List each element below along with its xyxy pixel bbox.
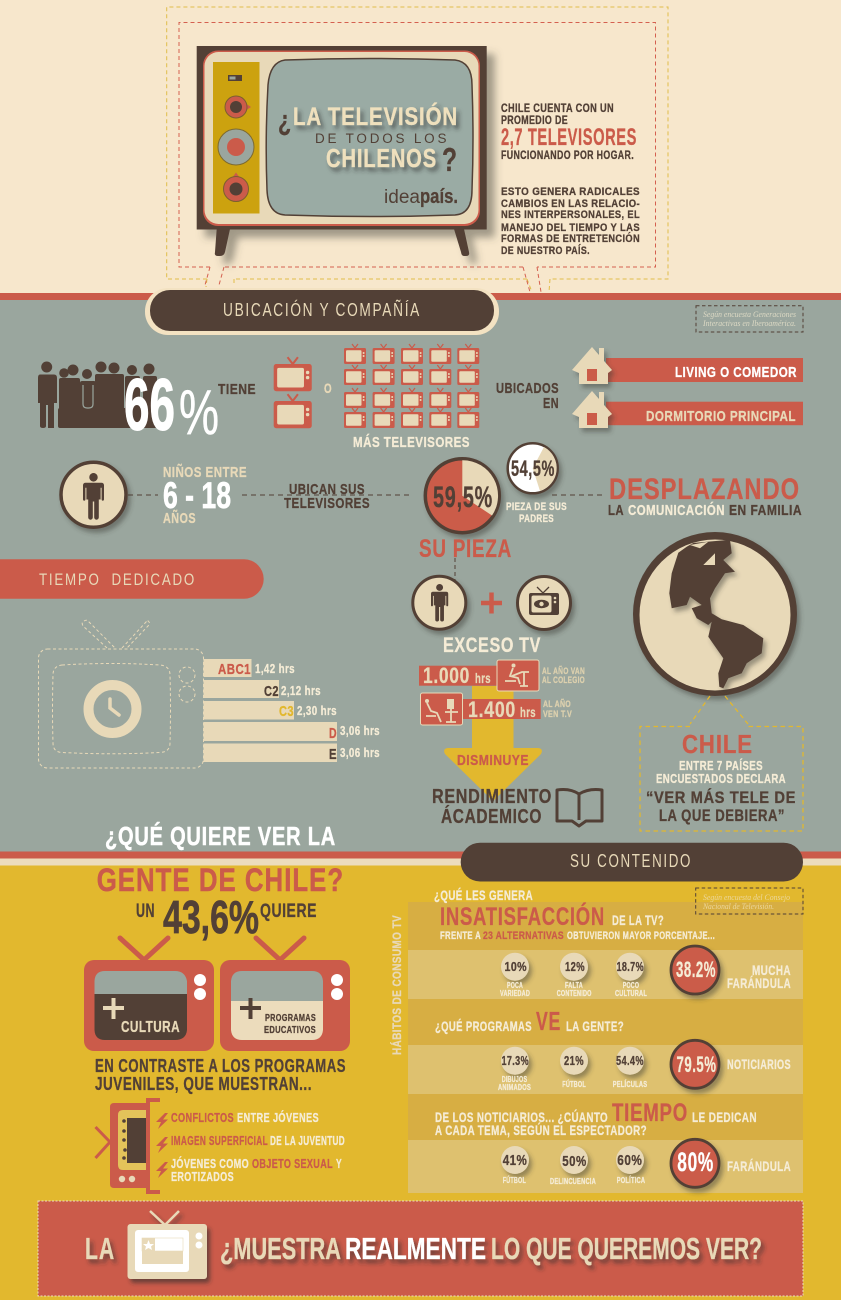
list item: objeto sexual: OBJETO SEXUAL — [252, 1157, 333, 1171]
label: ubican sus televisores — [284, 481, 370, 512]
arrow: disminuye — [444, 686, 542, 801]
stat: 1.000 hrs al colegio: AL AÑO VAN — [542, 666, 585, 677]
icon: globe — [633, 532, 797, 696]
heading pill: ubicación y compañía — [145, 288, 499, 335]
stats row: insatisfacción: CONTENIDO — [557, 989, 592, 998]
list item: objeto sexual — [156, 1156, 342, 1184]
heading: qué quiere ver la: ¿QUÉ QUIERE VER LA — [105, 821, 336, 851]
heading: desplazando la comunicación en familia: EN FAMILIA — [729, 503, 802, 519]
stats row: insatisfacción: FALTA — [565, 981, 583, 990]
icon: television más cultura: CULTURA — [121, 1019, 180, 1036]
logo: ideapaís: idea — [384, 187, 420, 208]
icon: television más programas educativos — [220, 938, 350, 1051]
label: pieza de sus padres: PADRES — [519, 513, 554, 525]
list item: conflictos entre jóvenes: CONFLICTOS — [171, 1111, 234, 1125]
stat: 1.400 hrs ven tv: VEN T.V — [543, 709, 572, 720]
stats row: programas: ANIMADOS — [498, 1083, 531, 1092]
bar chart: horas por grupo socioeconómico — [204, 659, 380, 763]
stat: un 43,6% quiere: QUIERE — [260, 901, 317, 922]
icon: viewer watching tv — [420, 693, 462, 725]
stat: 66 percent: % — [179, 378, 219, 448]
icon: open book — [557, 790, 602, 826]
bar: c2: C2 — [264, 683, 279, 700]
label: o: O — [324, 380, 332, 396]
stats row: insatisfacción: 38.2% — [676, 957, 716, 982]
panel: hábitos de consumo tv — [389, 888, 803, 1193]
title: la televisión de todos los chilenos: CHILENOS — [326, 143, 437, 173]
question: insatisfacción: OBTUVIERON MAYOR PORCENTAJE... — [567, 930, 715, 942]
heading pill: su contenido — [461, 843, 803, 882]
source note: generaciones interactivas: Interactivas en Iberoamérica. — [702, 319, 796, 328]
stats row: noticiarios: FÚTBOL — [503, 1176, 526, 1185]
heading pill: ubicación y compañía: UBICACIÓN Y COMPAÑÍA — [223, 299, 421, 320]
stats row: insatisfacción — [500, 946, 791, 998]
label: pieza de sus padres: PIEZA DE SUS — [506, 501, 567, 513]
label: ubicados en — [496, 381, 559, 412]
icon: person circle — [413, 576, 466, 629]
list item: imagen superficial: IMAGEN SUPERFICIAL — [171, 1134, 268, 1148]
icon: television más programas educativos: PROGRAMAS — [265, 1012, 316, 1024]
list item: imagen superficial: DE LA JUVENTUD — [270, 1134, 345, 1148]
stat: un 43,6% quiere: UN — [136, 901, 155, 922]
stats row: insatisfacción: CULTURAL — [615, 989, 647, 998]
question: insatisfacción — [434, 888, 715, 942]
heading: su pieza: SU PIEZA — [419, 535, 512, 563]
callout: chile ve más tele: CHILE — [682, 729, 753, 759]
stats row: programas — [498, 1040, 791, 1092]
stats row: noticiarios: DELINCUENCIA — [550, 1177, 596, 1186]
banner: la tv muestra realmente lo que queremos ver: ¿MUESTRA — [220, 1231, 341, 1266]
stats row: programas: PELÍCULAS — [613, 1080, 648, 1089]
banner: la tv muestra realmente lo que queremos ver: REALMENTE — [345, 1231, 486, 1266]
arrow: disminuye: DISMINUYE — [457, 753, 529, 769]
list item: conflictos entre jóvenes — [156, 1110, 319, 1129]
title: la televisión de todos los chilenos: LA TELEVISIÓN — [293, 101, 458, 131]
callout: chile ve más tele: ENTRE 7 PAÍSES — [679, 758, 763, 773]
background: yellow section — [0, 865, 841, 1300]
location: living o comedor: LIVING O COMEDOR — [675, 364, 797, 381]
stats row: insatisfacción: 10% — [504, 959, 527, 974]
stats row: insatisfacción: POCA — [507, 981, 523, 990]
label: ubicados en: EN — [543, 396, 559, 412]
stat: 1.400 hrs ven tv: AL AÑO — [543, 699, 571, 710]
title: la televisión de todos los chilenos: ? — [442, 141, 458, 178]
banner: la tv muestra realmente lo que queremos ver — [38, 1201, 803, 1296]
bar: c3: C3 — [279, 703, 294, 720]
heading: desplazando la comunicación en familia: COMUNICACIÓN — [628, 501, 725, 519]
icon: television with chilean flag — [128, 1211, 207, 1279]
text block: cambios en las relaciones: CAMBIOS EN LAS RELACIO- — [501, 198, 640, 210]
stats row: insatisfacción: 12% — [565, 959, 585, 974]
label: más televisores: MÁS TELEVISORES — [353, 434, 470, 451]
stat: 1.000 hrs al colegio: AL COLEGIO — [542, 675, 585, 686]
stats row: programas: FÚTBOL — [562, 1080, 586, 1089]
callout: chile ve más tele: ENCUESTADOS DECLARA — [656, 771, 786, 786]
icon: television with bracket — [96, 1100, 160, 1192]
question: cuánto tiempo: LE DEDICAN — [692, 1110, 757, 1125]
text block: cambios en las relaciones: DE NUESTRO PAÍS. — [501, 244, 590, 257]
stats row: insatisfacción: MUCHA — [752, 963, 791, 978]
question: qué programas ve la gente: ¿QUÉ PROGRAMAS — [435, 1019, 532, 1034]
callout: chile ve más tele: LA QUE DEBIERA” — [659, 806, 785, 825]
bar: d: 3,06 hrs — [340, 724, 380, 738]
icon: person in circle — [61, 462, 126, 527]
icon: television más programas educativos: EDUCATIVOS — [264, 1024, 316, 1036]
logo: ideapaís: país. — [420, 186, 458, 208]
title: la televisión de todos los chilenos: ¿ — [278, 105, 292, 137]
tv control panel — [213, 62, 260, 214]
pie chart: 59,5% su pieza: 59,5% — [433, 481, 493, 514]
heading pill: su contenido: SU CONTENIDO — [570, 851, 692, 871]
text: niños entre 6-18 años — [163, 463, 247, 527]
text block: promedio de televisores: PROMEDIO DE — [501, 115, 568, 127]
question: cuánto tiempo: DE LOS NOTICIARIOS... ¿CÚANTO — [435, 1110, 608, 1125]
source note: consejo nacional de televisión: Nacional de Televisión. — [702, 902, 774, 911]
text block: cambios en las relaciones: FORMAS DE ENTRETENCIÓN — [501, 232, 640, 245]
banner: la tv muestra realmente lo que queremos ver: LA — [85, 1231, 115, 1266]
label: ubican sus televisores: UBICAN SUS — [289, 481, 365, 498]
text: niños entre 6-18 años: AÑOS — [163, 509, 196, 527]
location: living o comedor — [572, 347, 803, 384]
question: qué programas ve la gente — [435, 1006, 624, 1036]
question: cuánto tiempo — [435, 1099, 757, 1138]
stat: 1.000 hrs al colegio: hrs — [475, 670, 491, 686]
stat: 1.400 hrs ven tv: 1.400 — [468, 697, 516, 722]
stats row: noticiarios: FARÁNDULA — [727, 1159, 791, 1174]
logo: ideapaís — [384, 186, 458, 208]
text block: promedio de televisores: CHILE CUENTA CON UN — [501, 103, 614, 115]
stat: 1.000 hrs al colegio — [419, 660, 585, 691]
label: pieza de sus padres — [506, 501, 567, 525]
source note: consejo nacional de televisión — [696, 888, 803, 914]
stats row: programas: 79.5% — [676, 1052, 716, 1077]
stats row: insatisfacción: FARÁNDULA — [727, 976, 791, 991]
pie chart: 54,5% pieza de sus padres — [508, 443, 558, 493]
icon: student at desk — [497, 660, 539, 691]
panel: retro television title — [197, 46, 487, 256]
bar: c2: 2,12 hrs — [281, 684, 321, 698]
stats row: programas: NOTICIARIOS — [727, 1057, 791, 1072]
question: insatisfacción: ¿QUÉ LES GENERA — [434, 888, 533, 903]
location: dormitorio principal: DORMITORIO PRINCIPAL — [646, 408, 796, 425]
stat: 1.000 hrs al colegio: 1.000 — [423, 663, 470, 688]
question: qué programas ve la gente: LA GENTE? — [566, 1019, 624, 1034]
list item: imagen superficial — [156, 1134, 345, 1153]
icon: television más cultura — [84, 938, 214, 1051]
tv body and legs — [197, 46, 487, 256]
text block: promedio de televisores — [501, 103, 637, 162]
question: insatisfacción: 23 ALTERNATIVAS — [483, 930, 564, 942]
bar: d: D — [329, 725, 337, 742]
text: en contraste a los programas juveniles: EN CONTRASTE A LOS PROGRAMAS — [95, 1056, 346, 1076]
bar: c3: 2,30 hrs — [297, 704, 337, 718]
stats row: insatisfacción: VARIEDAD — [500, 989, 530, 998]
question: insatisfacción: INSATISFACCIÓN — [440, 901, 605, 931]
text block: promedio de televisores: FUNCIONANDO POR HOGAR. — [501, 150, 634, 162]
bar: c3 — [204, 701, 337, 720]
stats row: programas: 17.3% — [502, 1053, 529, 1068]
bar: d — [204, 722, 380, 742]
list item: conflictos entre jóvenes: ENTRE JÓVENES — [237, 1110, 319, 1125]
bar: e — [204, 744, 380, 763]
title: la televisión de todos los chilenos — [278, 101, 458, 178]
stat: 1.400 hrs ven tv: hrs — [520, 704, 536, 720]
source note: generaciones interactivas — [696, 306, 803, 332]
icon: television with eye — [518, 576, 570, 630]
stats row: noticiarios: 50% — [562, 1153, 587, 1170]
stat: un 43,6% quiere: 43,6% — [163, 891, 259, 943]
text block: cambios en las relaciones — [501, 186, 640, 257]
source note: generaciones interactivas: Según encuesta Generaciones — [703, 310, 796, 319]
bar: c2 — [204, 680, 321, 700]
bar: abc1: ABC1 — [218, 661, 251, 678]
source note: consejo nacional de televisión: Según encuesta del Consejo — [703, 893, 790, 902]
dashed frame: red header outline — [179, 22, 656, 292]
heading: exceso tv: EXCESO TV — [443, 634, 541, 657]
stats row: programas: 21% — [564, 1053, 584, 1068]
icon: dashed television with clock — [38, 620, 204, 768]
text: en contraste a los programas juveniles — [95, 1056, 346, 1094]
text block: cambios en las relaciones: MANEJO DEL TIEMPO Y LAS — [501, 222, 640, 234]
stats row: noticiarios: POLÍTICA — [617, 1176, 645, 1185]
background: cream paper header — [0, 0, 841, 293]
heading pill: tiempo dedicado: TIEMPO DEDICADO — [39, 570, 196, 589]
label: ubicados en: UBICADOS — [496, 381, 559, 397]
stats row: programas: DIBUJOS — [502, 1075, 528, 1084]
callout: chile ve más tele — [640, 696, 803, 831]
location: dormitorio principal — [572, 391, 803, 428]
heading: desplazando la comunicación en familia — [608, 473, 802, 519]
stat: 66 percent: 66 — [124, 365, 175, 446]
label: rendimiento académico: ÁCADEMICO — [441, 805, 542, 828]
question: qué programas ve la gente: VE — [536, 1006, 561, 1036]
title: la televisión de todos los chilenos: DE TODOS LOS — [315, 131, 447, 146]
text: niños entre 6-18 años: 6 - 18 — [163, 475, 231, 516]
text: niños entre 6-18 años: NIÑOS ENTRE — [163, 463, 247, 481]
bar: abc1 — [204, 659, 295, 678]
background: grey section — [0, 299, 841, 852]
icon: two televisions — [274, 357, 312, 428]
text block: promedio de televisores: 2,7 TELEVISORES — [501, 124, 637, 151]
question: insatisfacción: DE LA TV? — [612, 912, 664, 928]
list item: objeto sexual: Y — [336, 1157, 342, 1171]
label: rendimiento académico — [432, 785, 552, 828]
icon: grid of televisions — [344, 344, 479, 428]
question: insatisfacción: FRENTE A — [440, 930, 481, 942]
question: cuánto tiempo: TIEMPO — [612, 1099, 688, 1127]
list item: objeto sexual: EROTIZADOS — [171, 1170, 234, 1184]
vertical label: HÁBITOS DE CONSUMO TV — [389, 915, 404, 1055]
heading: gente de chile: GENTE DE CHILE? — [97, 862, 344, 898]
label: tiene: TIENE — [218, 382, 256, 398]
pie chart: 54,5% pieza de sus padres: 54,5% — [511, 456, 555, 481]
bar: abc1: 1,42 hrs — [255, 662, 295, 676]
bar: e: E — [329, 746, 337, 763]
bar: e: 3,06 hrs — [340, 746, 380, 760]
heading: desplazando la comunicación en familia: LA — [608, 503, 624, 519]
icon: plus — [481, 592, 502, 614]
stat: 1.400 hrs ven tv — [420, 693, 572, 725]
stats row: insatisfacción: POCO — [623, 981, 639, 990]
tv screen — [266, 58, 473, 216]
label: rendimiento académico: RENDIMIENTO — [432, 785, 552, 808]
stats row: noticiarios: 41% — [503, 1152, 527, 1169]
heading pill: tiempo dedicado — [0, 559, 264, 599]
stats row: insatisfacción: 18.7% — [616, 959, 644, 974]
stats row: programas: 54.4% — [616, 1053, 644, 1068]
dashed frame: yellow header outline — [167, 7, 668, 292]
pie chart: 59,5% su pieza — [425, 459, 499, 533]
stats row: noticiarios — [501, 1139, 791, 1187]
label: ubican sus televisores: TELEVISORES — [284, 495, 370, 512]
text block: cambios en las relaciones: ESTO GENERA RADICALES — [501, 186, 640, 198]
text block: cambios en las relaciones: NES INTERPERSONALES, EL — [501, 209, 640, 221]
list item: objeto sexual: JÓVENES COMO — [171, 1156, 249, 1171]
stats row: noticiarios: 60% — [617, 1152, 642, 1169]
text: en contraste a los programas juveniles: JUVENILES, QUE MUESTRAN... — [95, 1074, 312, 1094]
stats row: noticiarios: 80% — [677, 1147, 714, 1177]
question: cuánto tiempo: A CADA TEMA, SEGÚN EL ESPECTADOR? — [435, 1123, 647, 1138]
callout: chile ve más tele: “VER MÁS TELE DE — [646, 788, 796, 807]
icon: crowd of people — [38, 362, 157, 428]
